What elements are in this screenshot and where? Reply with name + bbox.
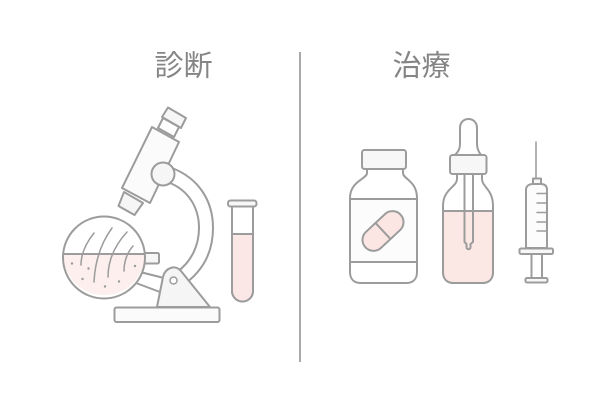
heading: diagnosis: 診断 [154, 50, 213, 82]
barrel [526, 184, 547, 248]
test tube [228, 200, 256, 302]
bottle body [350, 169, 417, 283]
needle [535, 142, 537, 178]
heading: treatment: 治療 [392, 50, 451, 82]
magnified skin circle [63, 216, 145, 298]
syringe [520, 142, 553, 282]
circle outline [63, 216, 145, 298]
microscope arm [170, 168, 213, 283]
skin dots [71, 262, 136, 288]
pipette [464, 174, 473, 249]
dropper bottle [443, 119, 493, 283]
thumb rest [526, 278, 548, 282]
eyepiece neck [158, 118, 179, 137]
microscope illustration [114, 108, 220, 322]
bottle label [350, 199, 417, 262]
pedestal hole [170, 277, 177, 284]
tube glass [232, 206, 253, 302]
hairs [81, 228, 133, 282]
microscope tube [122, 127, 179, 203]
eyepiece cap [162, 108, 186, 128]
circle background [63, 216, 145, 298]
dropper collar [450, 155, 486, 174]
plunger rod [532, 254, 542, 278]
objective lens [118, 192, 143, 215]
rubber bulb [455, 119, 481, 155]
dropper glass [443, 174, 493, 283]
tube liquid [232, 234, 253, 302]
base [114, 308, 220, 322]
stage [140, 253, 159, 264]
pill [358, 207, 408, 255]
flange [520, 248, 553, 254]
tick marks [537, 194, 547, 231]
pedestal [157, 267, 210, 307]
lower arm connector [136, 272, 164, 292]
tube lip [228, 200, 256, 206]
dropper liquid [443, 211, 493, 283]
center divider [299, 52, 301, 362]
skin surface line [63, 253, 145, 255]
focus knob [152, 162, 174, 186]
skin layer [63, 254, 145, 295]
hub [533, 178, 541, 184]
bottle cap [362, 150, 406, 169]
pill bottle [350, 150, 417, 283]
